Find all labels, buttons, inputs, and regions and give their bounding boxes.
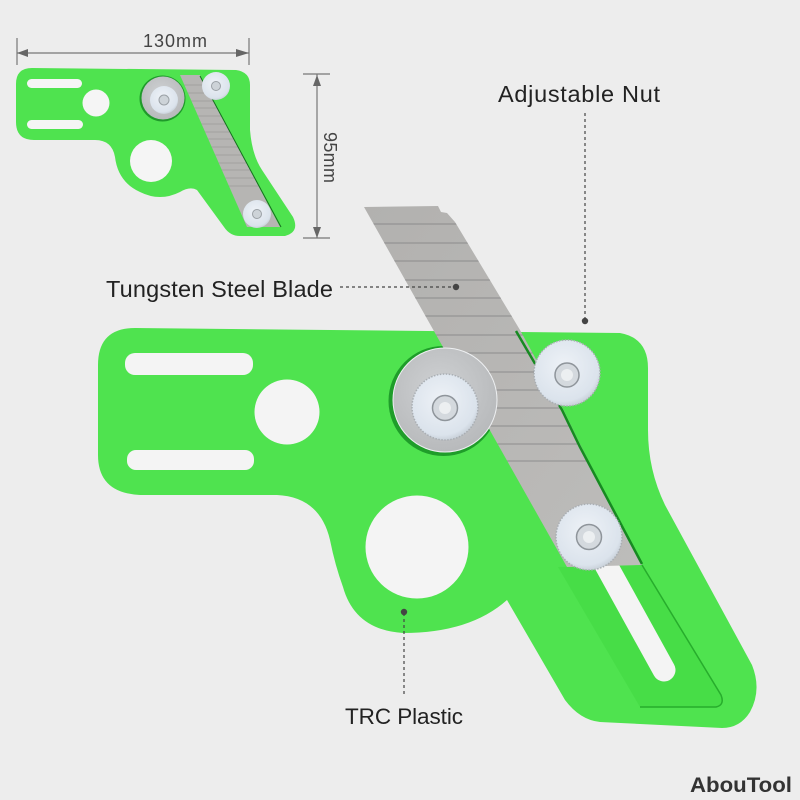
large washer with nut	[393, 348, 497, 452]
small nut bottom	[243, 200, 271, 228]
callout: TRC Plastic: TRC Plastic	[345, 704, 463, 729]
small slots and holes	[27, 79, 172, 182]
small product view with dimensions	[16, 31, 340, 238]
width dimension: 130mm	[17, 31, 249, 65]
callout: Tungsten Steel Blade	[106, 276, 459, 302]
height dimension: 95mm	[303, 74, 340, 238]
main product view	[98, 206, 757, 728]
callout: Adjustable Nut	[498, 81, 660, 324]
body recess channel	[558, 565, 722, 707]
adjustable nut bottom	[556, 504, 622, 570]
washer pocket	[388, 346, 498, 456]
brand mark: AbouTool	[690, 774, 792, 797]
body holes and slots	[125, 353, 664, 670]
small tool body	[16, 68, 295, 236]
callout: TRC Plastic	[345, 609, 463, 729]
height dimension: 95mm: 95mm	[320, 132, 340, 183]
callout: Tungsten Steel Blade: Tungsten Steel Blade	[106, 276, 333, 302]
tool body: green TRC plastic	[98, 328, 757, 728]
small nut top	[202, 72, 230, 100]
callout: Adjustable Nut: Adjustable Nut	[498, 81, 660, 107]
small washer and nut	[142, 76, 184, 120]
tungsten steel blade	[360, 206, 642, 567]
small blade	[140, 75, 290, 227]
width dimension: 130mm: 130mm	[143, 31, 207, 51]
adjustable nut top	[534, 340, 600, 406]
